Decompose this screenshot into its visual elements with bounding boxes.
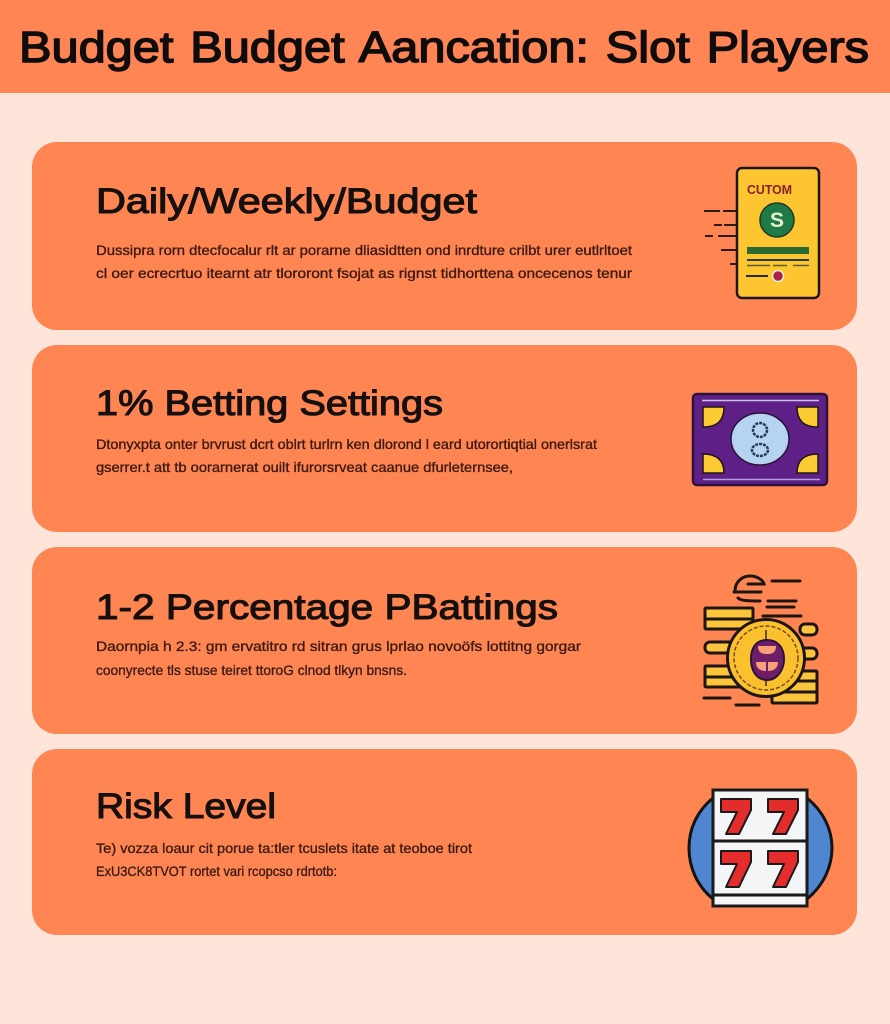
panel: betting settings — [32, 345, 857, 532]
icon: slot machine 777 — [689, 790, 832, 906]
text block: daily weekly budget: Dussipra rorn dtecfocalur rlt ar porarne dliasidtten ond inrdture crilbt urer eutlrltoet — [96, 242, 632, 258]
text block: percentage: Daornpia h 2.3: gm ervatitro rd sitran grus lprlao novoöfs lottitng gorgar — [96, 638, 581, 654]
title: Budget Budget Aancation: Slot Players — [19, 23, 869, 72]
icon: coin stack — [704, 576, 817, 705]
text block: percentage: coonyrecte tls stuse teiret ttoroG clnod tlkyn bnsns. — [96, 662, 407, 678]
text block: percentage — [96, 638, 581, 678]
icon: purple banknote — [693, 394, 827, 485]
text block: risk level — [96, 840, 472, 879]
text block: daily weekly budget: cl oer ecrecrtuo itearnt atr tlororont fsojat as rignst tidhorttena oncecenos tenur — [96, 265, 632, 281]
panel: daily weekly budget — [32, 142, 857, 330]
text block: betting settings: Dtonyxpta onter brvrust dcrt oblrt turlrn ken dlorond l eard utorortiqtial onerlsrat — [96, 436, 597, 452]
panel: percentage — [32, 547, 857, 734]
text block: risk level: ExU3CK8TVOT rortet vari rcopcso rdrtotb: — [96, 863, 337, 879]
heading: percentage: 1-2 Percentage PBattings — [96, 588, 558, 627]
heading: risk level: Risk Level — [96, 787, 276, 826]
panel: risk level — [32, 749, 857, 935]
text block: betting settings: gserrer.t att tb oorarnerat ouilt ifurorsrveat caanue dfurleternsee, — [96, 459, 513, 475]
text block: betting settings — [96, 436, 597, 475]
text block: daily weekly budget — [96, 242, 632, 281]
heading: daily weekly budget: Daily/Weekly/Budget — [96, 182, 477, 221]
header band — [0, 0, 890, 93]
heading: betting settings: 1% Betting Settings — [96, 384, 443, 423]
text block: risk level: Te) vozza loaur cit porue ta:tler tcuslets itate at teoboe tirot — [96, 840, 472, 856]
icon: budget card — [704, 168, 819, 298]
icon: budget card: S — [770, 209, 784, 232]
icon: budget card: CUTOM — [747, 183, 792, 197]
